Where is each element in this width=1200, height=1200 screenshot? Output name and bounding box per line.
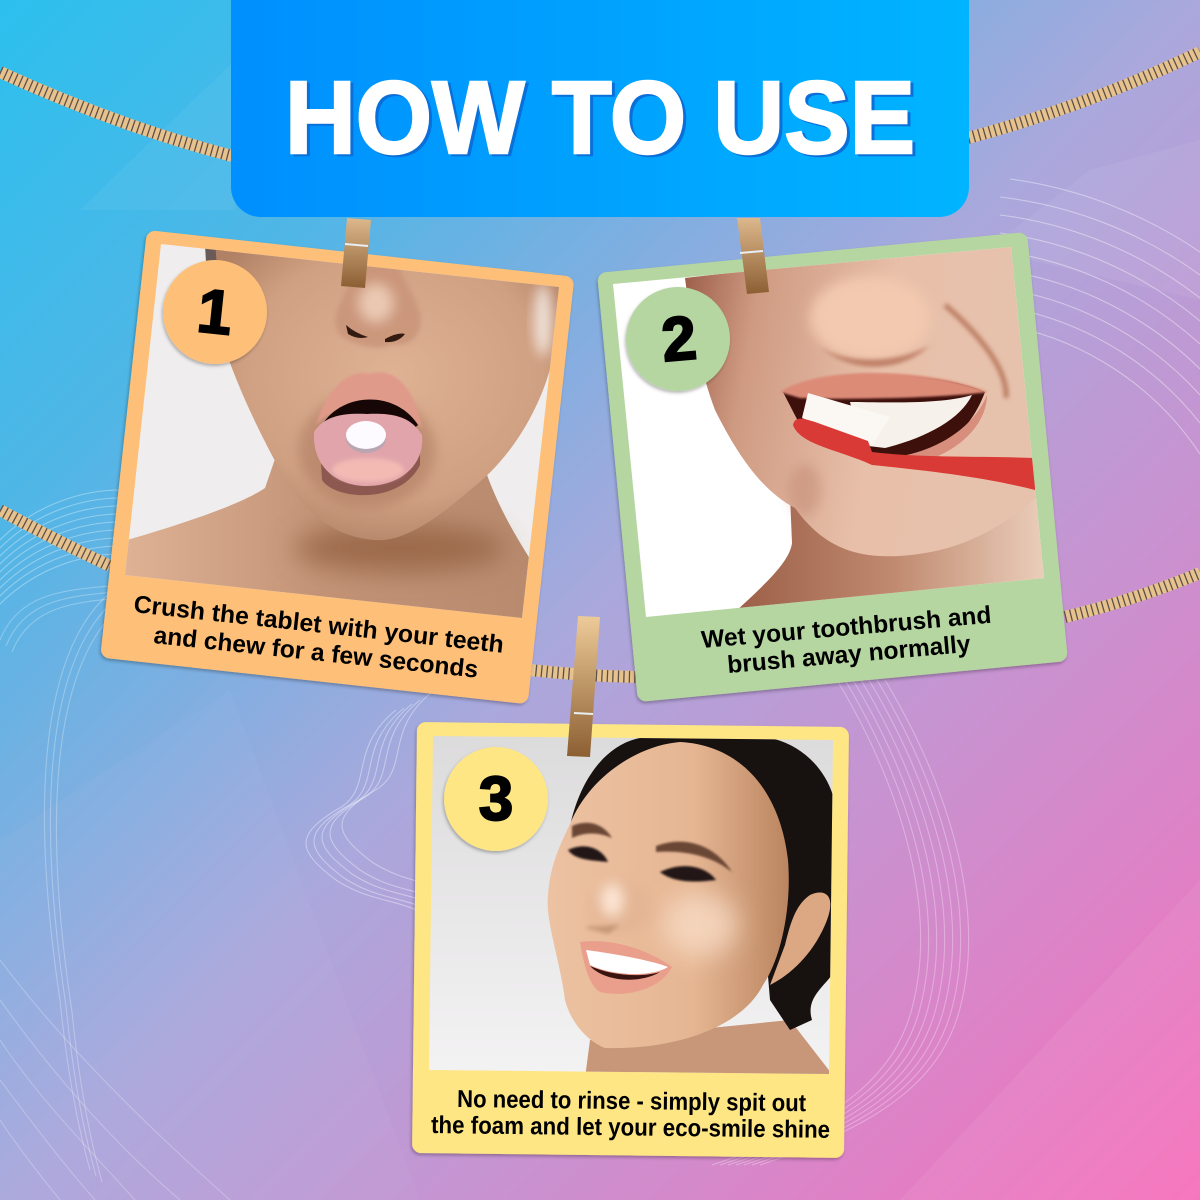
number badge 3: 3: [479, 765, 513, 834]
panel: step 3 polaroid: [412, 722, 849, 1158]
caption 3: No need to rinse - simply spit out: [457, 1086, 806, 1117]
panel: step 2 polaroid: [597, 232, 1068, 702]
photo: tablet on tongue: [125, 244, 559, 618]
caption 2: brush away normally: [726, 631, 972, 679]
number badge 2: 2: [659, 304, 699, 375]
photo: smiling woman: [425, 730, 840, 1080]
caption 2: [700, 602, 992, 679]
panel: step 1 polaroid: [100, 230, 580, 704]
clothesline ropes: [0, 52, 1200, 677]
caption 2: Wet your toothbrush and: [700, 602, 992, 654]
caption 1: Crush the tablet with your teeth: [132, 591, 505, 659]
photo: brushing teeth: [600, 240, 1050, 620]
number badge 1: [163, 260, 267, 364]
caption 3: the foam and let your eco-smile shine: [431, 1112, 830, 1144]
title: HOW TO USE: [285, 60, 915, 175]
clothes peg 1: [341, 218, 371, 288]
number badge 3: [444, 747, 548, 851]
caption 1: and chew for a few seconds: [152, 622, 479, 684]
clothes peg 2: [737, 218, 769, 294]
number badge 2: [626, 287, 730, 391]
number badge 1: 1: [194, 276, 236, 349]
header banner: [231, 0, 969, 217]
clothes peg 3: [567, 616, 600, 757]
caption 3: [431, 1086, 830, 1144]
